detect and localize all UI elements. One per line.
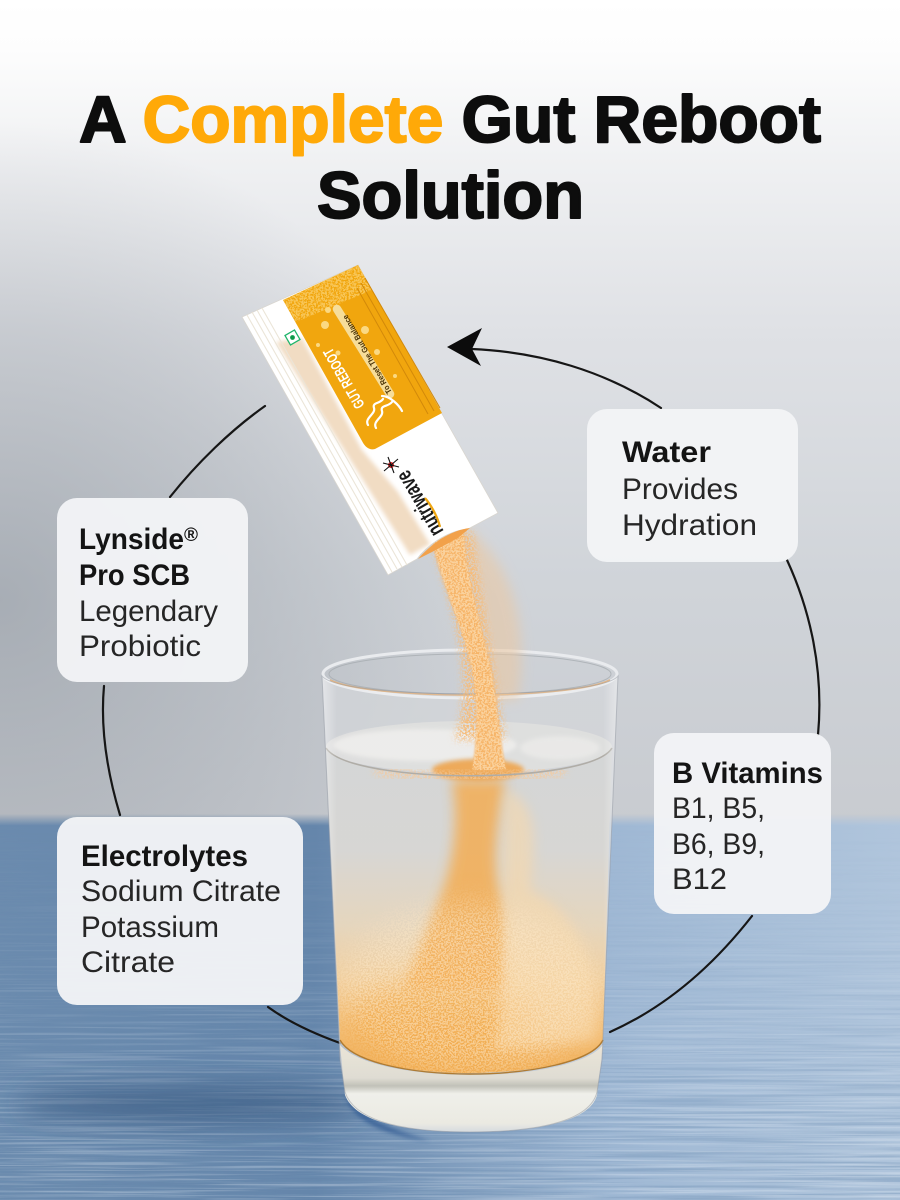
card: Water: Hydration bbox=[622, 509, 757, 542]
surface ring highlight bbox=[333, 729, 517, 761]
dissolving powder plume bbox=[405, 780, 506, 990]
card: B Vitamins bbox=[654, 733, 831, 914]
brand star bbox=[383, 457, 399, 473]
stream side grains bbox=[432, 530, 505, 740]
heading line two: Solution bbox=[317, 158, 584, 232]
surface powder bbox=[432, 759, 524, 781]
card: B Vitamins: B6, B9, bbox=[672, 828, 765, 861]
sachet inner mouth bbox=[418, 528, 470, 559]
arrowhead pointing to sachet bbox=[447, 328, 482, 366]
card: B Vitamins: B Vitamins bbox=[672, 757, 823, 790]
sachet top grain band bbox=[283, 265, 372, 322]
sachet stripe lines bbox=[357, 278, 440, 414]
card: Lynside Pro SCB: Probiotic bbox=[79, 630, 201, 663]
card: Lynside Pro SCB: Lynside bbox=[79, 523, 184, 556]
surface front line bbox=[326, 748, 612, 776]
stream core bbox=[432, 532, 506, 770]
heading bbox=[79, 82, 821, 232]
sachet beige panel bbox=[276, 338, 430, 555]
card: B Vitamins: B12 bbox=[672, 863, 727, 896]
water bottom edge bbox=[340, 1040, 603, 1074]
veg mark bbox=[285, 330, 300, 345]
heading line one: A Complete Gut Reboot bbox=[79, 82, 821, 156]
water surface bbox=[326, 721, 612, 773]
sachet product name: GUT REBOOT bbox=[320, 345, 368, 412]
card: Electrolytes bbox=[57, 817, 303, 1005]
sachet sparkles bbox=[316, 307, 397, 378]
cycle ring arcs bbox=[103, 349, 819, 1043]
sachet tagline: To Reset The Gut Balance bbox=[341, 313, 394, 396]
card: Lynside Pro SCB: Legendary bbox=[79, 595, 218, 628]
card: Lynside Pro SCB bbox=[57, 498, 248, 682]
surface right highlight bbox=[520, 736, 600, 760]
water body bbox=[326, 747, 612, 1073]
card: Electrolytes: Citrate bbox=[81, 946, 175, 979]
card: Lynside Pro SCB: Pro SCB bbox=[79, 559, 190, 592]
surface powder band bbox=[375, 771, 565, 777]
card: Electrolytes: Sodium Citrate bbox=[81, 875, 281, 908]
plume pale haze bbox=[495, 790, 597, 1050]
brand swoosh bbox=[425, 498, 440, 527]
water contents bbox=[340, 780, 600, 1075]
glass of water bbox=[322, 650, 618, 1132]
sachet brand name: nutriwave bbox=[391, 466, 448, 541]
falling powder stream bbox=[432, 530, 521, 770]
card: B Vitamins: B1, B5, bbox=[672, 792, 765, 825]
card: Water bbox=[587, 409, 798, 562]
card: Lynside Pro SCB: ® bbox=[184, 525, 198, 546]
card: Electrolytes: Electrolytes bbox=[81, 840, 248, 873]
sachet light pill bbox=[337, 309, 390, 394]
sachet gut icon bbox=[367, 396, 402, 428]
glass side highlight bbox=[322, 676, 618, 1132]
water bottom bloom bbox=[345, 983, 535, 1067]
sachet body bbox=[242, 265, 498, 575]
stream highlight grains bbox=[432, 532, 506, 770]
sachet orange panel bbox=[283, 265, 442, 449]
sachet crimp edge bbox=[247, 308, 407, 572]
glass base bbox=[340, 1045, 603, 1132]
card: Electrolytes: Potassium bbox=[81, 911, 219, 944]
background wall bbox=[0, 0, 900, 830]
card: Water: Provides bbox=[622, 473, 738, 506]
wooden table bbox=[0, 814, 900, 1200]
glass body bbox=[322, 676, 618, 1132]
sachet bbox=[242, 265, 498, 575]
glass rim bbox=[323, 650, 617, 698]
card: Water: Water bbox=[622, 436, 712, 469]
glass shadow on table bbox=[15, 1084, 430, 1141]
stream haze bbox=[460, 530, 521, 700]
plume grains bbox=[340, 905, 600, 1075]
